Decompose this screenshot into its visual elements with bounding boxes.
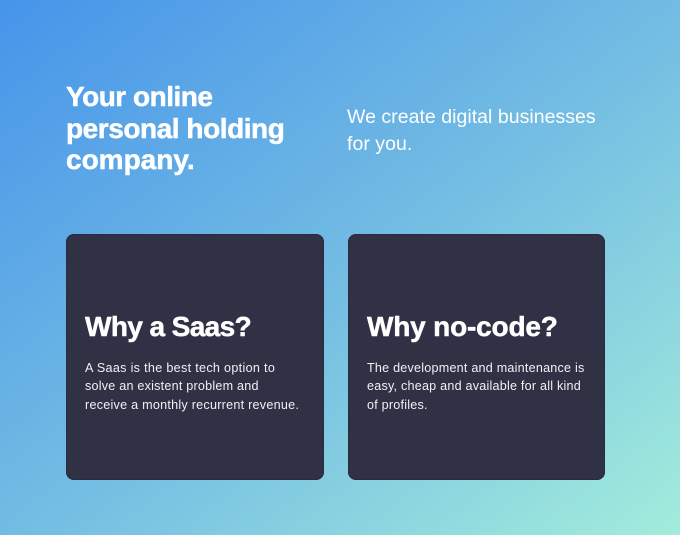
title: company.: [66, 144, 195, 175]
title: [66, 81, 284, 176]
text block: SaaS explanation: solve an existent problem and: [85, 379, 259, 393]
text block: no-code explanation: of profiles.: [367, 398, 428, 412]
text block: SaaS explanation: A Saas is the best tech option to: [85, 361, 275, 375]
heading: why no-code: Why no-code?: [367, 311, 558, 342]
text block: SaaS explanation: [85, 361, 299, 412]
panel: why no-code: [348, 234, 605, 480]
text block: no-code explanation: The development and maintenance is: [367, 361, 585, 375]
heading: why a SaaS: Why a Saas?: [85, 311, 251, 342]
title: personal holding: [66, 112, 284, 144]
panel: why a SaaS: [66, 234, 324, 480]
text block: no-code explanation: [367, 361, 585, 412]
text block: no-code explanation: easy, cheap and available for all kind: [367, 379, 581, 393]
text block: SaaS explanation: receive a monthly recurrent revenue.: [85, 398, 299, 412]
title: Your online: [66, 81, 212, 112]
subtitle: for you.: [347, 133, 412, 155]
subtitle: We create digital businesses: [347, 106, 596, 128]
subtitle: [347, 106, 596, 155]
